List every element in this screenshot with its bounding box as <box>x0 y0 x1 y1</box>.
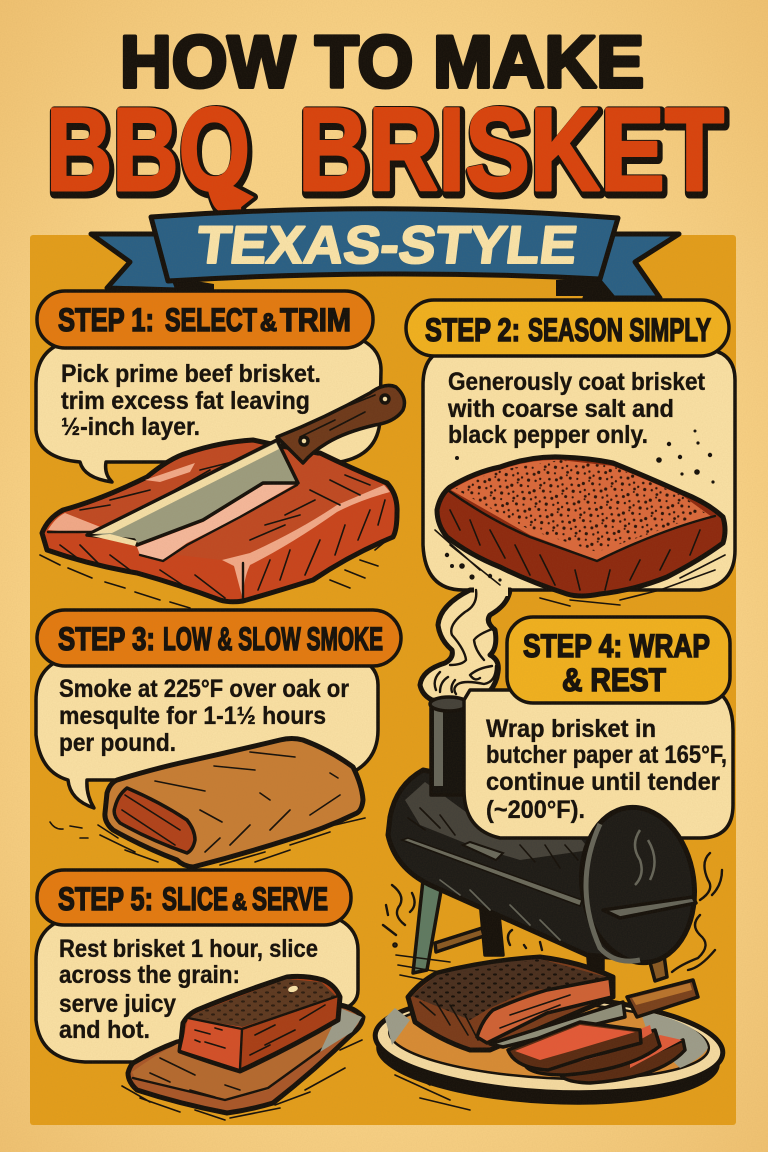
step 5 heading: STEP 5: <box>58 881 153 917</box>
step 4 heading: & REST <box>562 662 666 698</box>
step 1 body text: ½-inch layer. <box>61 413 200 441</box>
step 5 heading: & <box>232 889 247 916</box>
slices <box>560 1040 685 1083</box>
panel: step 2 season simply <box>406 300 735 606</box>
step 3 heading: LOW & SLOW SMOKE <box>163 621 383 657</box>
panel: step 5 slice and serve <box>36 870 363 1120</box>
step 5 heading pill <box>37 870 351 925</box>
title: BBQ brisket: BBQ <box>48 87 252 219</box>
step 5 body text: and hot. <box>59 1016 150 1044</box>
step 5 heading: SERVE <box>252 881 328 917</box>
step 2 body text: black pepper only. <box>448 421 648 449</box>
step 3 heading pill <box>37 610 401 666</box>
step 4 body text: Wrap brisket in <box>486 715 656 743</box>
step 1 speech bubble <box>36 340 381 482</box>
step 4 body text: butcher paper at 165°F, <box>486 741 727 769</box>
step 4 body text: (~200°F). <box>486 796 585 824</box>
step 2 body text: with coarse salt and <box>447 395 674 423</box>
serving knife <box>490 1002 625 1047</box>
illustration: sliced brisket on plate <box>373 955 725 1113</box>
step 5 body text: serve juicy <box>59 990 176 1018</box>
step 5 body text: Rest brisket 1 hour, slice <box>59 935 318 963</box>
step 3 heading <box>58 621 383 657</box>
smoke plume <box>420 586 510 704</box>
step 4 speech bubble <box>464 690 733 838</box>
step 3 body text <box>59 675 349 757</box>
step 2 heading: STEP 2: <box>425 312 520 348</box>
step 1 heading: & <box>260 309 277 337</box>
step 2 heading pill <box>406 300 729 356</box>
smoker door <box>572 800 704 970</box>
step 5 heading: SLICE <box>162 881 228 917</box>
step 3 speech bubble <box>36 660 378 808</box>
step 1 heading: TRIM <box>280 302 351 338</box>
step 4 body text <box>486 715 727 824</box>
illustration: wrapped brisket <box>50 738 365 867</box>
step 3 body text: per pound. <box>59 729 176 757</box>
smoker barrel <box>388 770 640 960</box>
panel: step 4 wrap and rest <box>373 586 733 1113</box>
title: BBQ brisket: BBQ <box>46 84 250 216</box>
step 4 heading <box>523 628 710 698</box>
step 3 body text: mesqulte for 1-1½ hours <box>59 702 326 730</box>
smoker legs <box>413 880 667 981</box>
illustration: sliced brisket on board <box>122 976 363 1120</box>
title: how to make: HOW TO MAKE <box>120 22 644 103</box>
step 2 speech bubble <box>423 350 735 590</box>
step 1 body text <box>61 360 321 441</box>
panel: step 3 low and slow smoke <box>36 610 401 867</box>
step 3 body text: Smoke at 225°F over oak or <box>59 675 349 703</box>
step 5 speech bubble <box>36 920 358 1062</box>
step 2 body text: Generously coat brisket <box>448 368 706 396</box>
step 4 body text: continue until tender <box>486 768 720 796</box>
step 4 heading: STEP 4: WRAP <box>523 628 710 664</box>
illustration: seasoned brisket <box>435 457 725 606</box>
step 5 body text: across the grain: <box>59 961 240 989</box>
illustration: raw brisket with knife <box>40 385 404 608</box>
brisket chunk <box>408 957 613 1050</box>
step 2 heading <box>425 312 711 348</box>
step 2 body text <box>447 368 706 449</box>
step 3 heading: STEP 3: <box>58 621 155 657</box>
step 4 heading box <box>507 617 730 703</box>
step 1 body text: trim excess fat leaving <box>61 387 310 415</box>
panel: step 1 select and trim <box>36 291 404 608</box>
pepper specks <box>445 430 715 582</box>
step 1 body text: Pick prime beef brisket. <box>61 360 321 388</box>
step 1 heading pill <box>37 291 373 348</box>
step 5 body text <box>59 935 318 1044</box>
smoker stack <box>430 697 468 795</box>
step 1 heading <box>58 302 351 338</box>
banner: Texas-style <box>91 209 679 298</box>
step 1 heading: SELECT <box>165 302 257 338</box>
heat squiggles <box>383 853 722 972</box>
orange main panel <box>30 235 736 1125</box>
banner: Texas-style: TEXAS-STYLE <box>193 216 580 275</box>
step 1 heading: STEP 1: <box>58 302 154 338</box>
title: BBQ brisket <box>46 84 726 219</box>
brisket block <box>180 976 340 1071</box>
step 5 heading <box>58 881 328 917</box>
